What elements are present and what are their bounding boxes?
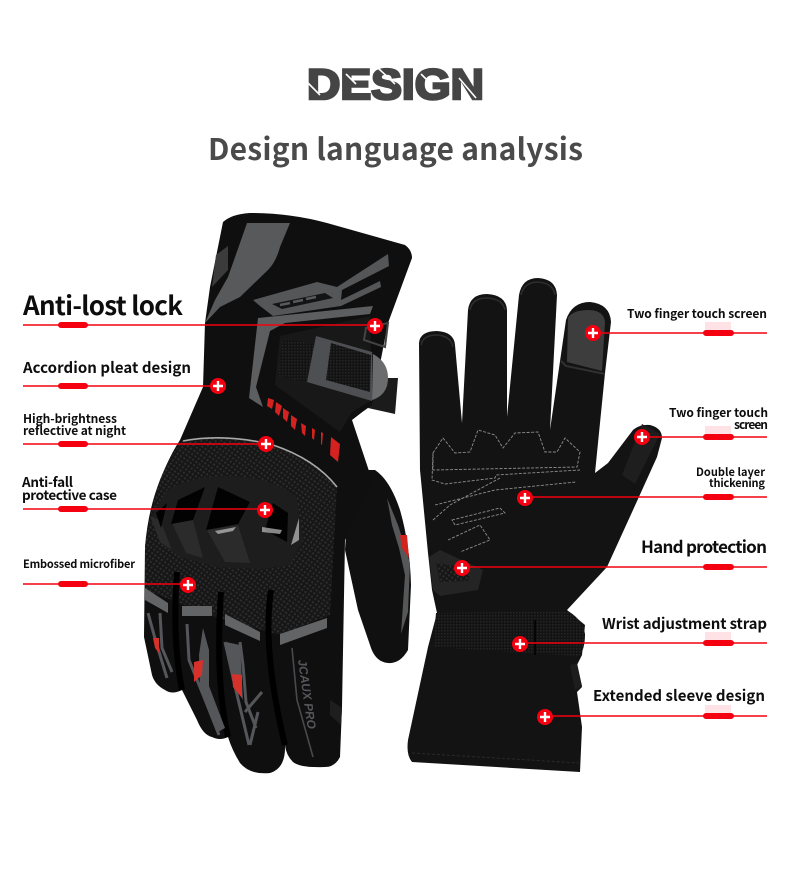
marker: wrist strap [512,636,528,652]
hand silhouette [144,213,412,773]
guard windows [156,487,288,542]
marker: hand protection [454,560,470,576]
marker: microfiber [180,577,196,593]
label: Two finger touch screen: Two finger touch screen [627,305,767,322]
cuff emblem [212,246,228,287]
title: Design language analysis [208,125,583,169]
wrist protector [429,550,483,596]
label: Anti-lost lock: Anti-lost lock [22,286,183,323]
wing detail [272,293,333,309]
marker: touch index [585,325,601,341]
index finger leather tip [567,310,605,371]
brand strip [292,648,313,757]
wrist strap [433,611,585,656]
callout lines: left [23,325,375,584]
knuckle guard [151,476,303,569]
red reflective stripes [267,398,340,462]
buckle [307,336,372,401]
logo: DESIGN: DESIGN [307,61,484,109]
label: Two finger touch screen, two lines: Two finger touch [669,404,768,421]
brand text: JCAUX PRO [295,658,319,730]
palm stitching [432,430,580,552]
marker: anti-lost lock [367,318,383,334]
thumb [345,470,411,663]
wing dashes [280,297,316,305]
label glow [705,322,731,713]
glove: back of hand [144,213,412,773]
cuff wing stripe [253,254,389,316]
label: Anti-fall protective case: protective case [22,484,117,504]
label: Anti-fall protective case [21,471,117,504]
finger bands [145,588,327,645]
label: Double layer thickening [696,464,765,491]
strap tab [368,378,398,414]
sleeve side tab [570,663,582,690]
side band [249,306,373,407]
red finger tags [153,638,242,698]
strap panel [275,316,372,432]
label: reflective: reflective at night [23,422,126,439]
thumb grey trim [387,498,410,634]
callout lines: right [462,322,767,716]
glove: palm [408,278,662,772]
finger blades [199,628,243,732]
anti-lost loop [364,323,388,347]
thumb leather tip [622,424,660,484]
guard highlights [215,518,299,545]
label: Accordion pleat design: Accordion pleat design [22,357,191,378]
tip seam [561,361,605,374]
reflective arc [183,438,337,487]
buckle slot [326,343,371,392]
label: Extended sleeve design: Extended sleeve design [593,685,765,706]
marker: touch thumb [634,429,650,445]
marker: protective case [257,502,273,518]
thumb red tag [400,535,409,558]
knuckle mesh [145,437,337,635]
label: Two finger touch screen, two lines: screen [734,416,768,433]
strap fold [534,620,536,655]
marker: sleeve [537,709,553,725]
label: Two finger touch screen, two lines [669,404,768,433]
finger graphics [148,613,262,745]
label: reflective [23,410,126,439]
label: reflective: High-brightness [23,410,117,427]
marker: double layer [517,490,533,506]
sleeve hem stitch [412,753,579,763]
palm silhouette [408,278,662,772]
cuff leather patch [330,700,342,725]
label: Hand protection: Hand protection [641,533,767,558]
marker: reflective [258,436,274,452]
label: Anti-fall protective case: Anti-fall [21,471,73,491]
label: Double layer thickening: Double layer [696,464,765,480]
protector mesh [436,563,470,582]
label: Wrist adjustment strap: Wrist adjustment strap [602,613,767,634]
label: Embossed microfiber: Embossed microfiber [23,556,135,572]
label: Double layer thickening: thickening [709,475,765,491]
guard lower fingers [150,516,250,563]
webbing strap [278,339,373,396]
marker: accordion pleat [210,378,226,394]
cuff swoosh [205,223,290,323]
finger seams [175,572,285,745]
buckle back plate [372,354,388,400]
finger tip edges [421,282,555,347]
